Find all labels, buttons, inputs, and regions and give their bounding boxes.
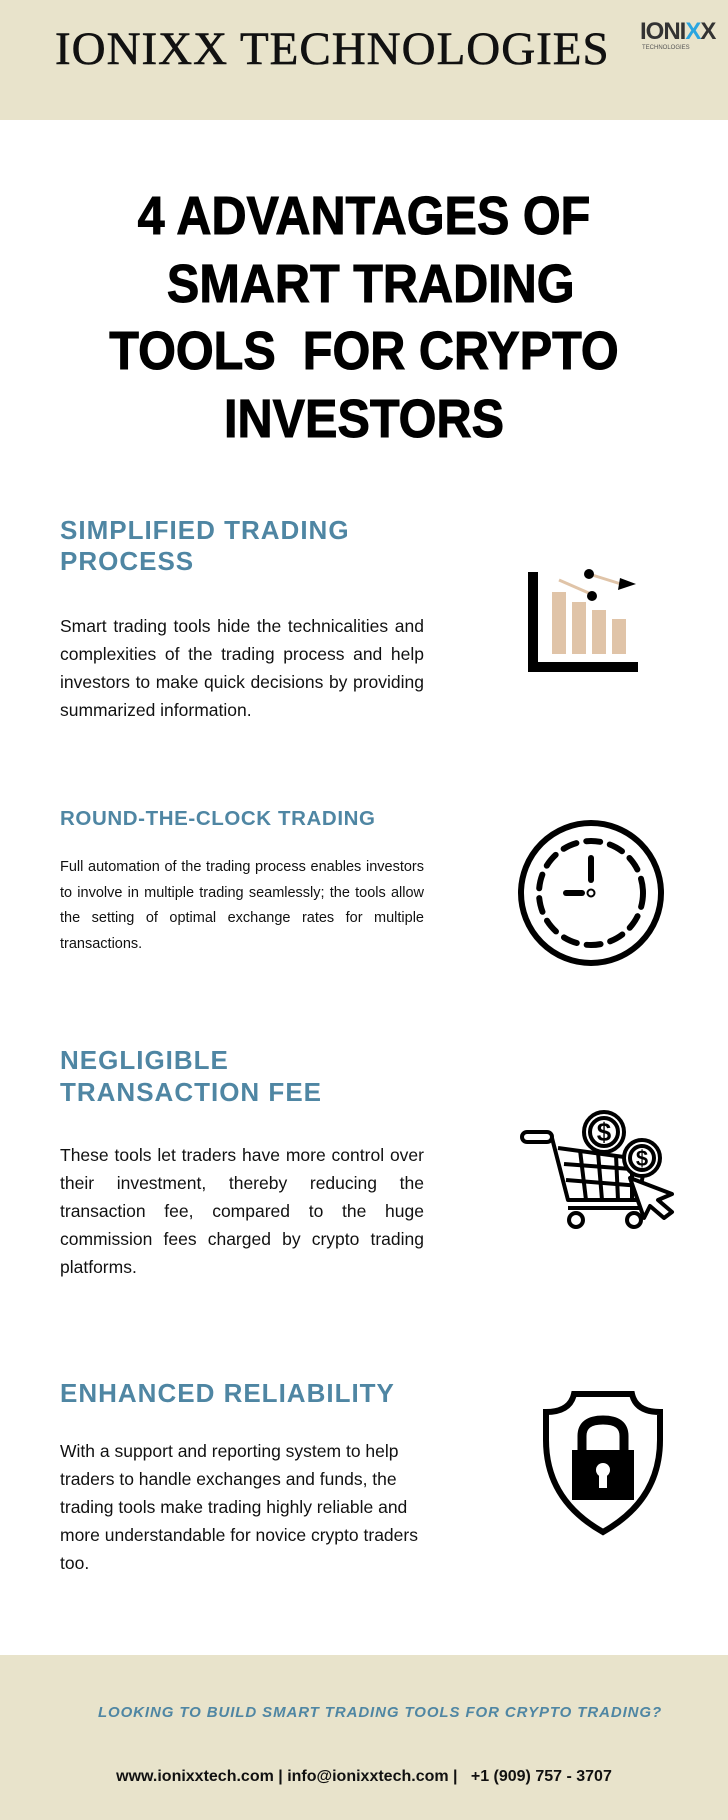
heading 3: NEGLIGIBLE: [60, 1045, 229, 1075]
main title: 4 ADVANTAGES OF: [138, 186, 590, 246]
header band: [0, 0, 728, 120]
icon: cart with coins: $: [597, 1117, 612, 1147]
main title: INVESTORS: [224, 388, 504, 448]
icon: shield lock: [543, 1391, 663, 1536]
main title: SMART TRADING: [167, 254, 575, 314]
icon: cart with coins: $: [636, 1146, 648, 1171]
heading 2: ROUND-THE-CLOCK TRADING: [60, 807, 376, 830]
text 2: Full automation of the trading process enables investors to involve in multiple trading seamlessly; the tools allow the setting of optimal exchange rates for multiple transactions.: [60, 859, 424, 952]
icon: clock: [518, 820, 664, 966]
section 2: [60, 807, 424, 952]
header title: IONIXX TECHNOLOGIES: [55, 23, 610, 75]
heading 4: ENHANCED RELIABILITY: [60, 1378, 395, 1408]
heading 1: SIMPLIFIED TRADING: [60, 515, 350, 545]
heading 3: TRANSACTION FEE: [60, 1077, 322, 1107]
heading 1: [60, 515, 350, 576]
section 1: [60, 515, 424, 720]
logo: TECHNOLOGIES: [642, 45, 690, 51]
main title: [109, 186, 619, 448]
tagline: LOOKING TO BUILD SMART TRADING TOOLS FOR CRYPTO TRADING?: [98, 1704, 662, 1721]
heading 3: [60, 1045, 322, 1107]
text 1: Smart trading tools hide the technicalities and complexities of the trading process and help investors to make quick decisions by providing summarized information.: [60, 616, 424, 720]
section 4: [60, 1378, 418, 1573]
logo: IONIXX: [640, 18, 715, 45]
heading 1: PROCESS: [60, 546, 194, 576]
section 3: [60, 1045, 424, 1277]
footer band: [0, 1655, 728, 1820]
icon: bar chart: [528, 569, 638, 672]
text 3: These tools let traders have more control over their investment, thereby reducing the transaction fee, compared to the huge commission fees charged by crypto trading platforms.: [60, 1145, 424, 1277]
icon: cart with coins: [520, 1110, 674, 1229]
main title: TOOLS FOR CRYPTO: [109, 321, 619, 381]
text 4: With a support and reporting system to help traders to handle exchanges and funds, the trading tools make trading highly reliable and more understandable for novice crypto traders too.: [60, 1441, 418, 1573]
contact line: www.ionixxtech.com | info@ionixxtech.com | +1 (909) 757 - 3707: [116, 1768, 612, 1785]
